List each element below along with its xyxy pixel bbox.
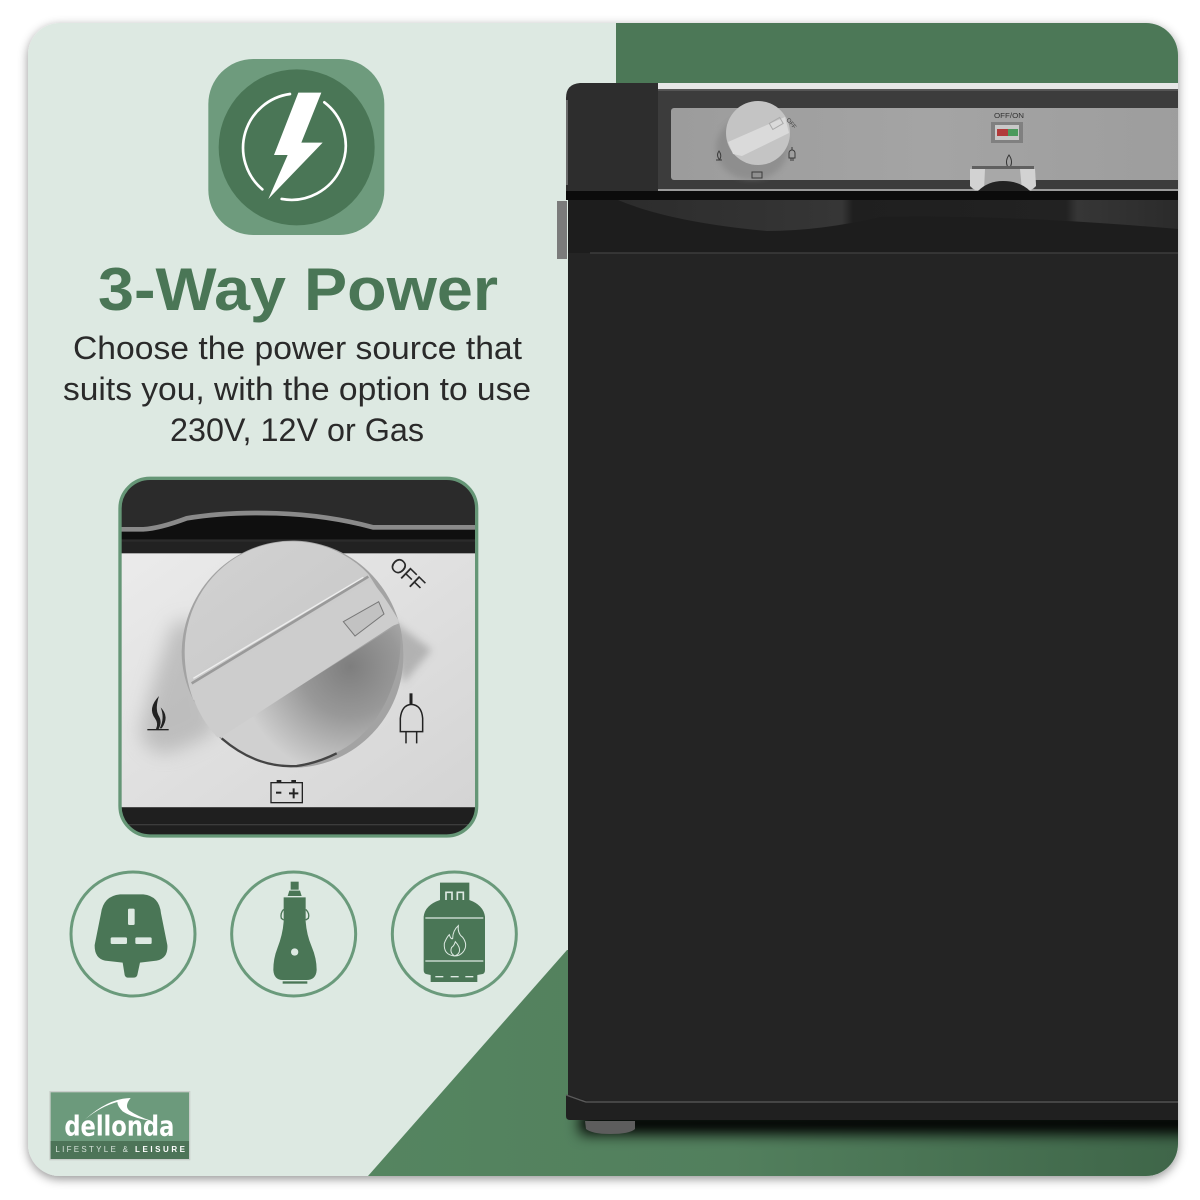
description text: suits you, with the option to use [63, 371, 531, 407]
lid band [568, 200, 1200, 253]
description text [63, 330, 531, 448]
description text: 230V, 12V or Gas [170, 412, 424, 448]
indicator label: OFF/ON [994, 111, 1024, 120]
hinge tab [557, 201, 567, 259]
logo: dellonda [50, 1092, 190, 1160]
dial knob [182, 541, 403, 768]
panel: dial close-up photo [120, 478, 477, 836]
igniter button [970, 155, 1036, 191]
panel mini icons [716, 147, 795, 178]
temperature dial [716, 101, 790, 180]
icon: battery [271, 780, 302, 803]
icon: 12V car charger [232, 872, 356, 996]
icon: mains plug [400, 693, 423, 743]
power source icons [71, 872, 516, 996]
logo: dellonda: dellonda [64, 1112, 174, 1143]
icon: gas flame [147, 696, 169, 730]
description text: Choose the power source that [73, 330, 522, 366]
on/off indicator [991, 122, 1023, 143]
fridge foot [585, 1121, 635, 1134]
icon: mains plug [71, 872, 195, 996]
icon: gas bottle [392, 872, 516, 996]
icon: lightning badge [208, 59, 384, 235]
fridge top left block [566, 83, 660, 192]
dial label: OFF: OFF [385, 553, 429, 597]
title: 3-Way Power [98, 256, 498, 323]
fridge body [568, 250, 1200, 1105]
fridge base [566, 1095, 1188, 1120]
clear control panel [658, 83, 1188, 191]
green backdrop shapes [368, 23, 1178, 1176]
logo: dellonda: LIFESTYLE & [55, 1145, 129, 1154]
gap under panel [566, 191, 1200, 200]
logo: dellonda: LEISURE [135, 1145, 186, 1154]
panel label OFF: OFF [784, 117, 797, 131]
product photo: fridge [557, 83, 1200, 1134]
